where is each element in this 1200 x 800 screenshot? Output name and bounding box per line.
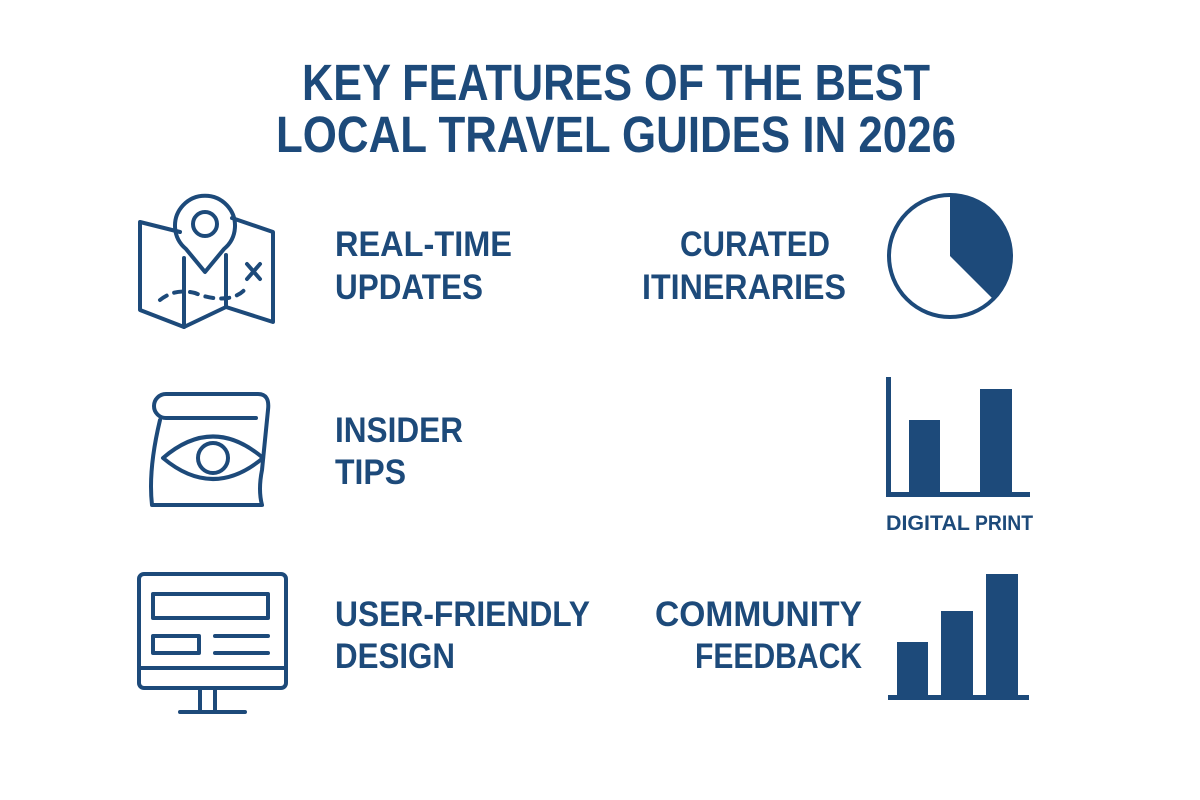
label: user-friendly design: DESIGN xyxy=(335,637,455,676)
title: KEY FEATURES OF THE BEST xyxy=(302,54,930,111)
label: user-friendly design: USER-FRIENDLY xyxy=(335,595,590,634)
label: real-time updates: UPDATES xyxy=(335,268,483,307)
label: insider tips: TIPS xyxy=(335,453,406,492)
label: curated itineraries xyxy=(642,225,846,307)
icon: scroll with eye xyxy=(151,394,268,505)
pie chart xyxy=(889,195,1011,317)
label: user-friendly design xyxy=(335,595,590,676)
bar chart: community growth xyxy=(888,574,1029,700)
title: LOCAL TRAVEL GUIDES IN 2026 xyxy=(276,106,956,163)
icon: map with pin xyxy=(140,196,273,327)
label: insider tips xyxy=(335,411,463,492)
label: curated itineraries: ITINERARIES xyxy=(642,268,846,307)
label: community feedback xyxy=(655,595,862,676)
label: insider tips: INSIDER xyxy=(335,411,463,450)
label: real-time updates xyxy=(335,225,512,307)
label: community feedback: COMMUNITY xyxy=(655,595,862,634)
bar chart: digital vs print: DIGITAL xyxy=(886,512,970,535)
bar chart: digital vs print: PRINT xyxy=(975,512,1033,535)
label: real-time updates: REAL-TIME xyxy=(335,225,512,264)
title xyxy=(276,54,956,163)
icon: monitor xyxy=(139,574,286,712)
bar chart: digital vs print xyxy=(886,377,1033,535)
label: curated itineraries: CURATED xyxy=(680,225,830,264)
label: community feedback: FEEDBACK xyxy=(695,637,862,676)
